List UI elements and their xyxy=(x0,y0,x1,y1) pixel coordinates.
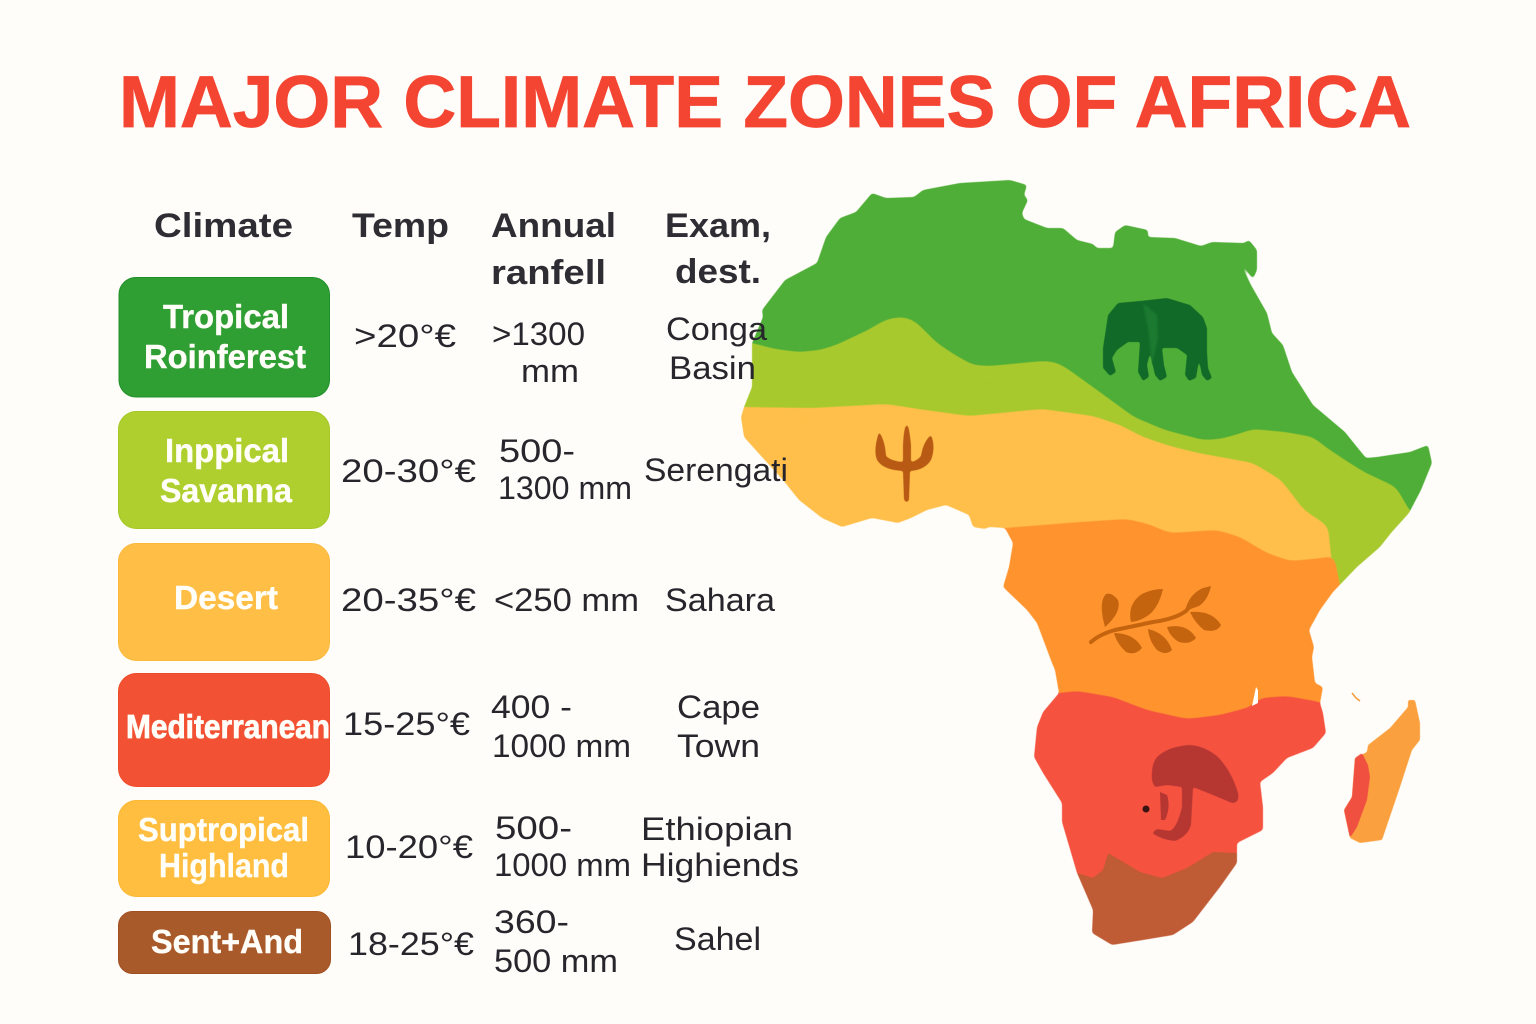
title: MAJOR CLIMATE ZONES OF AFRICA xyxy=(119,62,1411,143)
badge: Inppical Savanna: Inppical xyxy=(165,432,289,469)
icon: mushroom xyxy=(1142,745,1238,841)
example destination xyxy=(666,311,767,386)
mainland bands xyxy=(741,180,1432,945)
zone: savanna light green xyxy=(744,317,1410,585)
badge: Desert: Desert xyxy=(174,579,278,616)
header: Annual ranfell xyxy=(491,207,616,292)
temperature: 15-25°€ xyxy=(343,706,470,742)
rainfall: 400 - xyxy=(491,689,572,725)
badge: Sent+And xyxy=(118,912,330,974)
example destination: Sahara xyxy=(665,582,775,618)
header: Annual ranfell: Annual xyxy=(491,207,616,245)
badge: Suptropical Highland: Suptropical xyxy=(138,811,309,848)
row: mediterranean xyxy=(118,674,760,786)
example destination: Serengati xyxy=(644,452,788,488)
example destination: Highiends xyxy=(641,847,799,883)
row: subtropical highland xyxy=(118,800,799,896)
row: tropical savanna xyxy=(118,412,788,528)
badge: Mediterranean: Mediterranean xyxy=(126,708,330,745)
row: semi-arid xyxy=(118,904,761,979)
example destination: Conga xyxy=(666,311,767,347)
mushroom shape xyxy=(1152,745,1238,841)
badge: Inppical Savanna xyxy=(118,412,330,528)
white notch in coast xyxy=(1252,687,1258,706)
Madagascar orange zone xyxy=(1344,700,1420,843)
header: Climate: Climate xyxy=(154,207,293,245)
badge: Desert xyxy=(118,544,330,660)
rainfall: 1000 mm xyxy=(494,847,631,883)
icon: leafy branch xyxy=(1091,586,1221,653)
badge: Tropical Roinferest: Roinferest xyxy=(144,338,306,375)
temperature: 20-30°€ xyxy=(341,453,476,489)
rainfall xyxy=(494,810,631,883)
example destination: Sahel xyxy=(674,921,761,957)
zone: mediterranean red xyxy=(1034,691,1326,878)
rainfall xyxy=(492,316,585,389)
zone: semi-arid brown xyxy=(1077,852,1238,945)
zone: tropical rainforest green xyxy=(752,180,1432,511)
zone: equatorial orange xyxy=(1004,519,1340,719)
row: tropical rainforest xyxy=(119,278,767,397)
temperature: >20°€ xyxy=(354,318,456,354)
badge: Suptropical Highland: Highland xyxy=(159,847,289,884)
map: Africa climate zones xyxy=(741,180,1432,945)
rainfall: mm xyxy=(521,353,579,389)
badge: Mediterranean xyxy=(118,674,330,786)
rainfall: 1300 mm xyxy=(498,470,632,506)
header: Temp: Temp xyxy=(352,207,449,245)
rainfall: 500- xyxy=(495,810,572,846)
rainfall: 500 mm xyxy=(494,943,618,979)
header: Exam, dest. xyxy=(665,207,771,291)
rainfall: >1300 xyxy=(492,316,585,352)
icon: elephant xyxy=(1103,298,1212,381)
zone: desert yellow xyxy=(741,404,1332,561)
example destination: Town xyxy=(677,728,760,764)
example destination: Basin xyxy=(669,350,756,386)
mushroom inner mark xyxy=(1160,792,1169,820)
rainfall: <250 mm xyxy=(494,582,639,618)
badge: Inppical Savanna: Savanna xyxy=(160,472,293,509)
small island mark xyxy=(1352,693,1360,701)
example destination xyxy=(641,811,799,883)
rainfall xyxy=(498,433,632,506)
example destination: Ethiopian xyxy=(641,811,793,847)
icon: cactus xyxy=(875,425,934,502)
row: desert xyxy=(118,544,775,660)
black dot xyxy=(1142,806,1150,812)
rainfall: 1000 mm xyxy=(492,728,631,764)
rainfall xyxy=(494,904,618,979)
Madagascar red zone xyxy=(1344,753,1370,838)
rainfall: 500- xyxy=(499,433,575,469)
header: Exam, dest.: dest. xyxy=(675,253,761,291)
temperature: 10-20°€ xyxy=(345,829,473,865)
badge: Suptropical Highland xyxy=(118,800,330,896)
temperature: 20-35°€ xyxy=(341,582,476,618)
table header xyxy=(154,207,771,292)
header: Annual ranfell: ranfell xyxy=(491,254,606,292)
rainfall: 360- xyxy=(494,904,569,940)
badge: Tropical Roinferest xyxy=(119,278,330,397)
temperature: 18-25°€ xyxy=(348,926,474,962)
example destination: Cape xyxy=(677,689,760,725)
header: Exam, dest.: Exam, xyxy=(665,207,771,245)
Madagascar xyxy=(1344,700,1420,843)
rainfall xyxy=(491,689,631,764)
badge: Tropical Roinferest: Tropical xyxy=(163,298,289,335)
example destination xyxy=(677,689,760,764)
badge: Sent+And: Sent+And xyxy=(151,923,303,960)
